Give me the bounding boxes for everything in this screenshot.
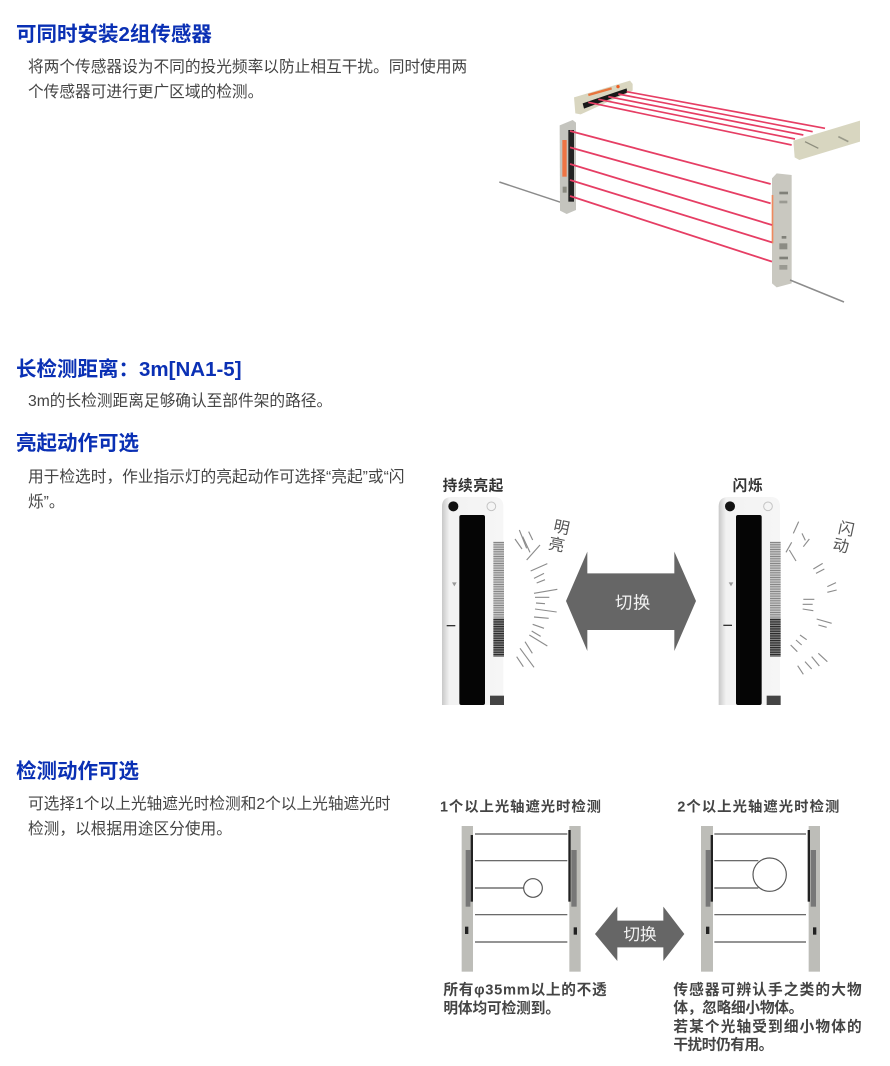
text block: lighting action selectable: 烁”。 — [28, 494, 65, 510]
lower left sensor — [560, 120, 576, 214]
text block: detection action selectable — [28, 795, 391, 838]
caption: two beam mode: 干扰时仍有用。 — [673, 1036, 773, 1054]
double arrow: switch: 切换 — [615, 593, 650, 613]
caption: two beam mode — [673, 980, 862, 1054]
heading: lighting action selectable: 亮起动作可选 — [16, 432, 139, 455]
light rays: flashing — [786, 522, 837, 674]
label: steady on: 持续亮起 — [443, 476, 504, 494]
upper left sensor — [574, 81, 633, 114]
text block: long detection range: 3m的长检测距离足够确认至部件架的路径。 — [28, 393, 332, 410]
caption: two beam mode: 传感器可辨认手之类的大物 — [673, 980, 862, 998]
heading: long detection range: 长检测距离：3m[NA1-5] — [16, 352, 242, 382]
light rays: bright — [515, 530, 557, 667]
double arrow: switch — [595, 907, 684, 961]
text block: lighting action selectable — [28, 464, 404, 510]
right sensor — [719, 497, 781, 705]
label: flashing motion: 动 — [831, 536, 851, 557]
one beam sensor pair — [462, 826, 581, 972]
double arrow: switch: 切换 — [623, 925, 657, 944]
figure: one-beam versus two-beam detection — [440, 797, 862, 1054]
label: bright — [547, 518, 571, 556]
heading: detection action selectable: 检测动作可选 — [16, 760, 139, 783]
caption: two beam mode: 体，忽略细小物体。 — [673, 998, 803, 1016]
left cable — [499, 182, 561, 202]
one beam lines and small object — [475, 834, 567, 942]
heading: install two sensor sets: 可同时安装2组传感器 — [16, 23, 212, 46]
label: flashing: 闪烁 — [733, 477, 763, 494]
right cable — [790, 280, 844, 302]
text block: install two sensor sets: 将两个传感器设为不同的投光频率以防止相互干扰。同时使用两 — [28, 59, 467, 76]
double arrow: switch — [566, 552, 696, 651]
caption: one beam mode — [443, 981, 607, 1017]
two beam lines and large object — [714, 834, 806, 942]
text block: install two sensor sets: 个传感器可进行更广区域的检测。 — [28, 84, 263, 100]
two beam sensor pair — [701, 826, 820, 972]
left sensor — [442, 497, 504, 705]
caption: one beam mode: 明体均可检测到。 — [443, 999, 560, 1017]
label: bright: 明 — [552, 518, 571, 538]
text block: detection action selectable: 可选择1个以上光轴遮光时检测和2个以上光轴遮光时 — [28, 796, 391, 813]
upper right sensor — [793, 121, 860, 160]
figure: steady versus flashing indicator — [442, 476, 856, 705]
lower beams — [570, 131, 772, 262]
label: one beam mode: 1个以上光轴遮光时检测 — [440, 797, 601, 815]
caption: one beam mode: 所有φ35mm以上的不透 — [443, 981, 607, 999]
caption: two beam mode: 若某个光轴受到细小物体的 — [673, 1018, 862, 1036]
label: bright: 亮 — [547, 535, 566, 556]
text block: detection action selectable: 检测，以根据用途区分使用。 — [28, 816, 232, 838]
lower right sensor — [772, 173, 792, 287]
label: flashing motion — [831, 519, 856, 557]
upper beams — [588, 92, 825, 145]
figure: two sensor pairs with red beams — [499, 80, 860, 303]
label: flashing motion: 闪 — [837, 519, 856, 540]
text block: lighting action selectable: 用于检选时，作业指示灯的亮起动作可选择“亮起”或“闪 — [28, 464, 404, 487]
text block: install two sensor sets — [28, 58, 467, 100]
label: two beam mode: 2个以上光轴遮光时检测 — [677, 797, 839, 815]
